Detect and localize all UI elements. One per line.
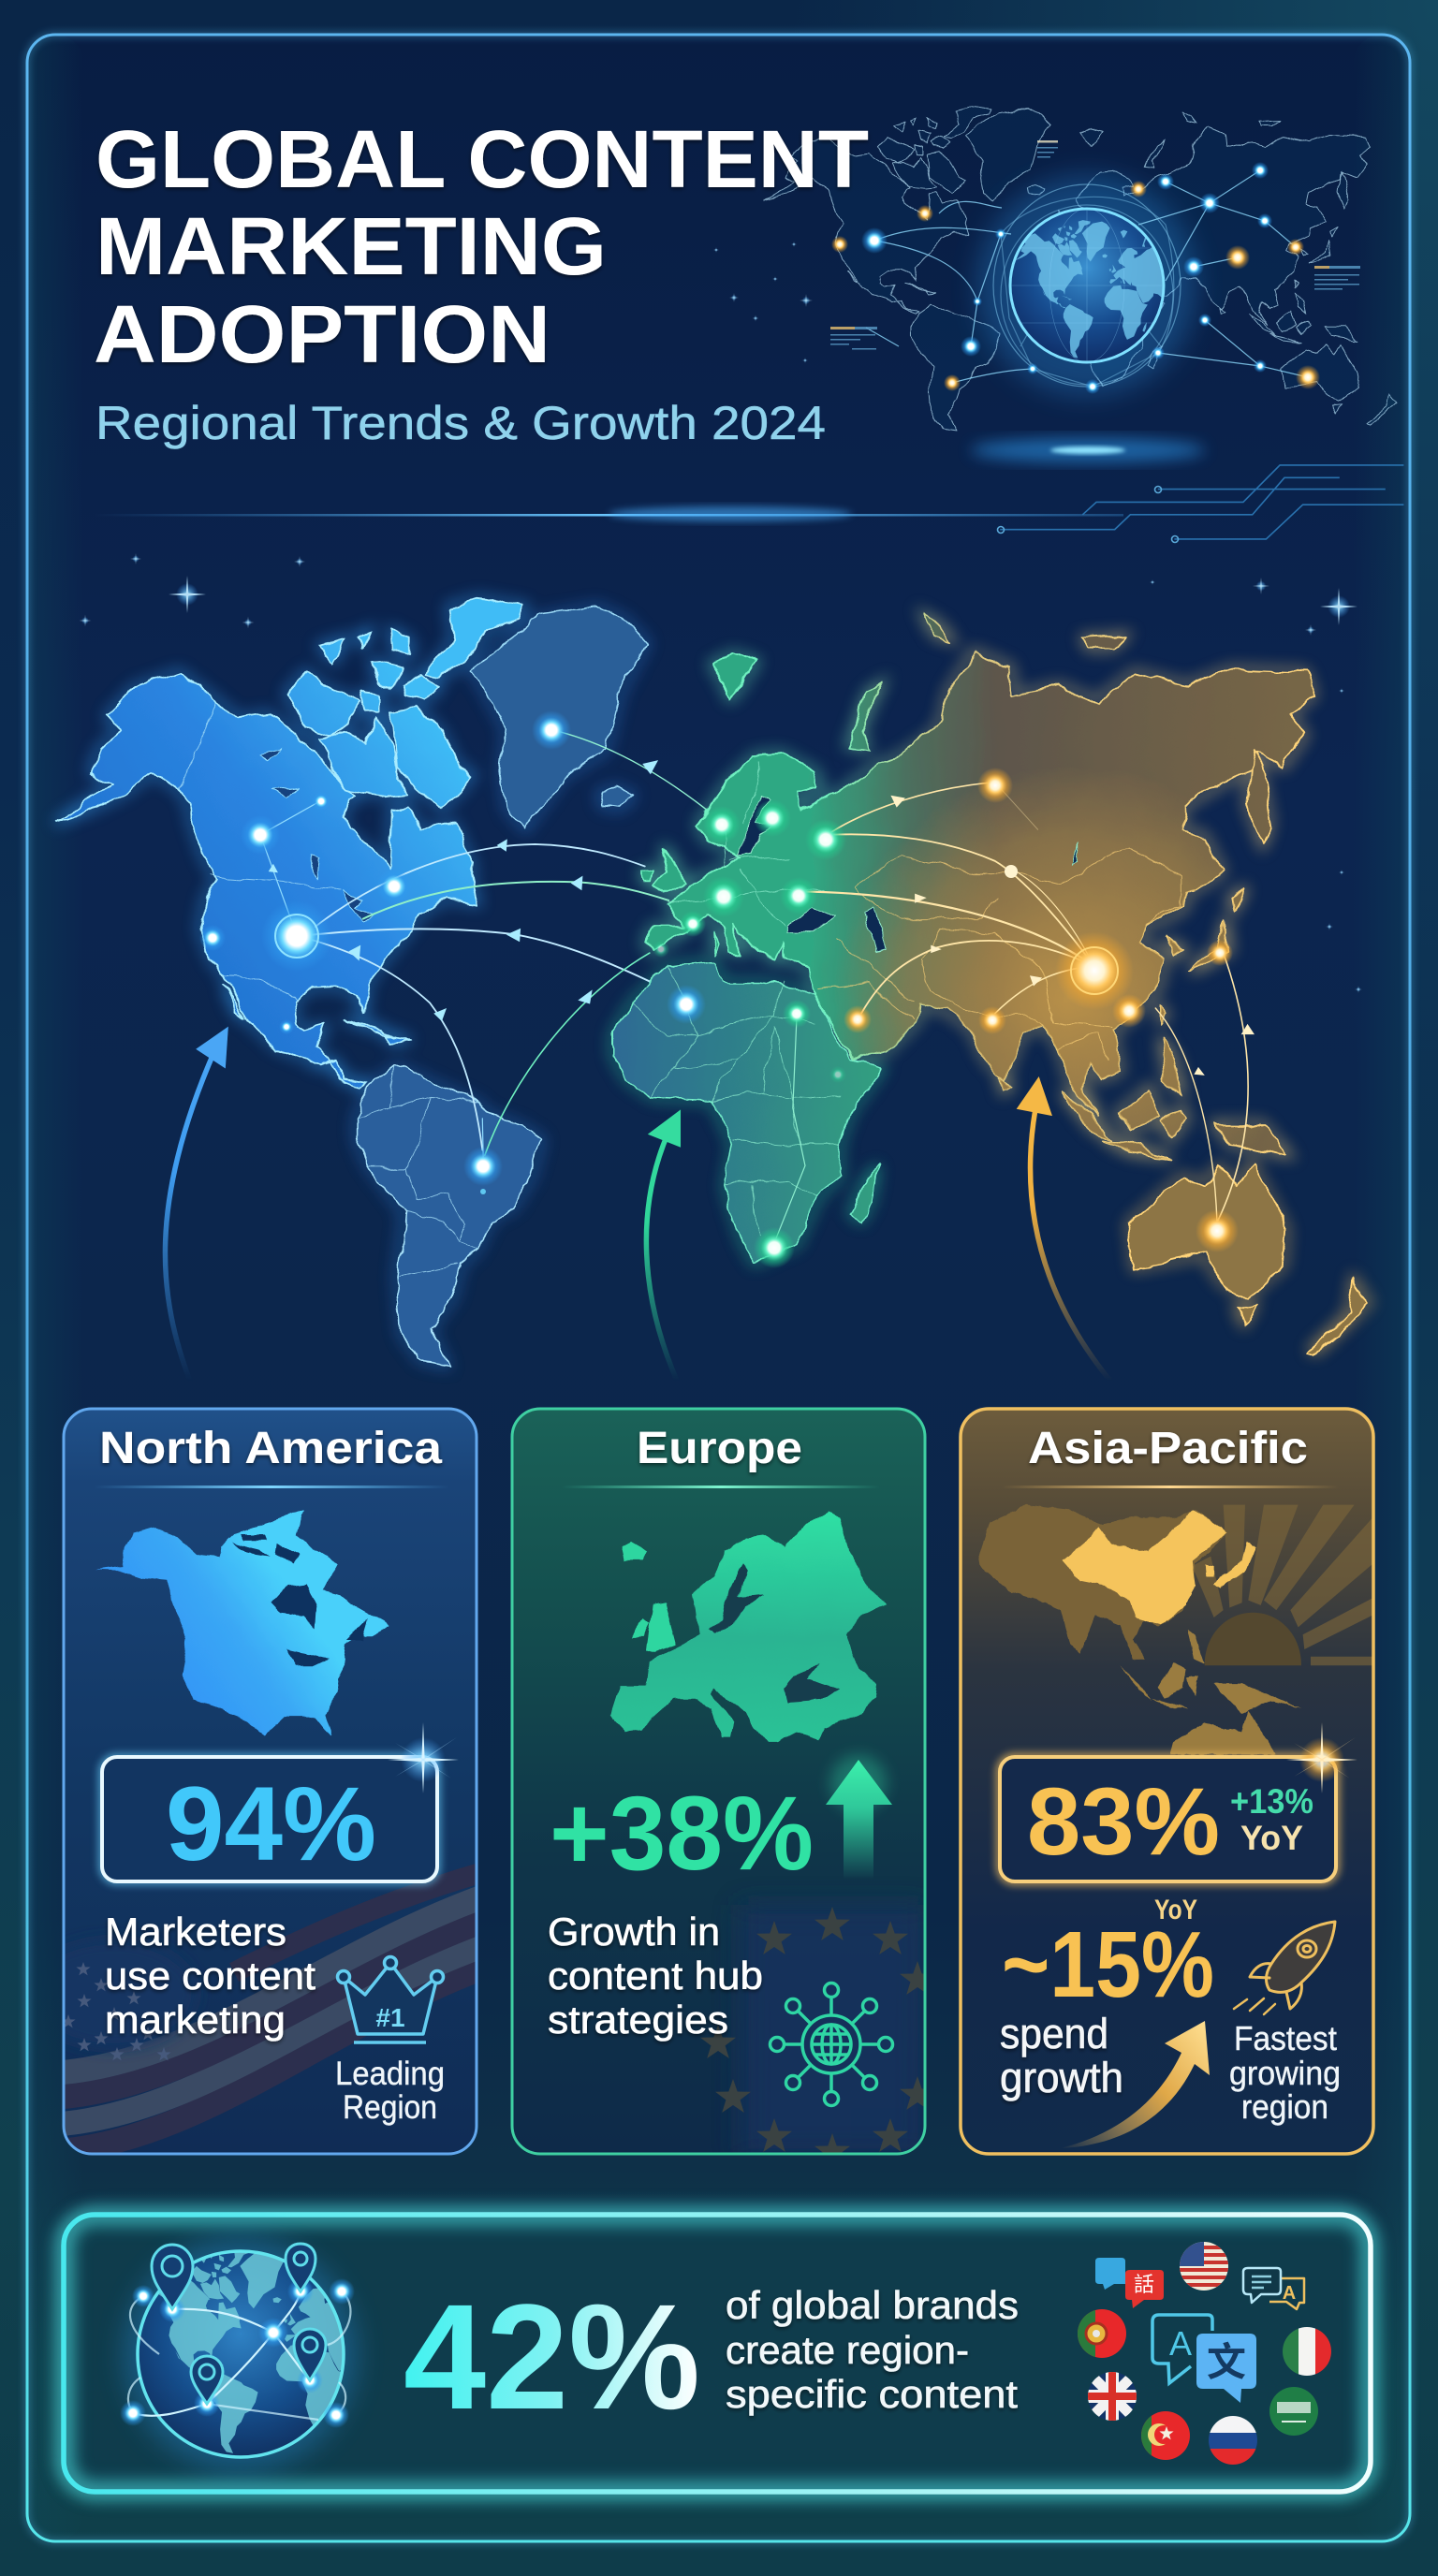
flag: Italy (1283, 2327, 1331, 2376)
panel: global brands callout (64, 2215, 1371, 2492)
header network globe map (766, 105, 1397, 462)
stat box 83% (1000, 1722, 1357, 1881)
stat ~15% YoY: YoY (1154, 1895, 1197, 1925)
eastern connection arcs and arrow (776, 783, 1255, 1383)
description text: marketing (105, 1998, 286, 2042)
title: MARKETING (95, 201, 607, 292)
fastest growing region text (1229, 2019, 1341, 2126)
description text: strategies (548, 1998, 728, 2042)
flag: USA (1180, 2242, 1228, 2291)
icon: rocket (1234, 1922, 1335, 2014)
subtitle: Regional Trends & Growth 2024 (95, 397, 826, 449)
spend growth text: spend (1000, 2010, 1108, 2057)
fastest growing region text: Fastest (1234, 2019, 1337, 2057)
leading region label: Region (343, 2089, 437, 2126)
title: ADOPTION (94, 289, 550, 380)
big green arrow (646, 1109, 681, 1383)
title (94, 114, 869, 380)
mini legends (830, 140, 1360, 350)
chat bubbles: blue and red (1095, 2258, 1164, 2308)
panel: Europe (512, 1409, 935, 2167)
flag: Saudi Arabia (1269, 2387, 1318, 2436)
chat bubbles: text and A (1243, 2268, 1304, 2309)
map: Asia-Pacific with rising sun (978, 1505, 1373, 1754)
US flag backdrop (28, 1872, 484, 2151)
callout text: specific content (726, 2372, 1018, 2416)
title: GLOBAL CONTENT (95, 114, 869, 205)
fastest growing region text: region (1241, 2087, 1328, 2126)
small world outline map (766, 105, 1397, 430)
big blue arrow (165, 1027, 228, 1383)
callout text (726, 2283, 1019, 2416)
icon: crown (337, 1956, 444, 2042)
panel: North America (28, 1409, 484, 2154)
flag: Portugal (1078, 2309, 1126, 2358)
blue map nodes (199, 710, 706, 1194)
network lines (866, 170, 1308, 387)
growth arrow (1061, 2021, 1210, 2148)
description text (105, 1910, 315, 2042)
spend growth text: growth (1000, 2054, 1123, 2101)
gold map nodes (844, 768, 1239, 1252)
flag: UK (1088, 2372, 1137, 2421)
americas and greenland land (55, 598, 647, 1366)
map glow (55, 598, 1370, 1366)
card heading: Europe (637, 1424, 802, 1473)
description text: Growth in (548, 1910, 720, 1954)
flag: Russia (1209, 2416, 1257, 2465)
network nodes (831, 162, 1320, 394)
icon: content hub (770, 1983, 893, 2106)
description text: content hub (548, 1954, 763, 1998)
callout text: of global brands (726, 2283, 1019, 2327)
stat box 83%: YoY (1240, 1819, 1303, 1857)
description text (548, 1910, 763, 2042)
stat +38%: +38% (550, 1775, 814, 1892)
africa europe asia oceania land (612, 614, 1370, 1353)
icon: up arrow (826, 1755, 892, 1880)
stat ~15% YoY: ~15% (1002, 1912, 1214, 2017)
translation bubbles: A (1169, 2324, 1192, 2363)
header divider and circuit lines (94, 465, 1403, 543)
icon: crown: #1 (375, 2003, 405, 2032)
background stars (80, 242, 1362, 993)
flag: Turkey (1141, 2411, 1190, 2460)
icon: language flags and chat bubbles (1078, 2242, 1331, 2465)
callout text: create region- (726, 2328, 969, 2372)
translation bubbles (1152, 2315, 1256, 2403)
stat box 83%: 83% (1027, 1768, 1220, 1875)
green map nodes (653, 799, 846, 1268)
map: Europe (610, 1511, 887, 1742)
leading region label (335, 2056, 445, 2126)
spend growth text (1000, 2010, 1123, 2101)
stat box 94%: 94% (166, 1765, 376, 1882)
americas connection arcs and arrows (165, 730, 712, 1383)
panel: Asia-Pacific (961, 1409, 1373, 2154)
card heading: Asia-Pacific (1028, 1424, 1308, 1473)
EU flag backdrop (700, 1905, 923, 2153)
chat bubbles: text and A: A (1283, 2283, 1296, 2304)
stat box 94% (102, 1722, 459, 1882)
stat 42%: 42% (404, 2273, 700, 2440)
leading region label: Leading (335, 2056, 445, 2092)
card heading: North America (99, 1424, 442, 1473)
fastest growing region text: growing (1229, 2054, 1341, 2092)
big gold arrow (1017, 1076, 1113, 1383)
world map (55, 598, 1370, 1383)
description text: use content (105, 1954, 315, 1998)
chat bubbles: blue and red: 話 (1134, 2273, 1154, 2296)
icon: globe with location pins (112, 2228, 369, 2481)
map: North America (95, 1510, 389, 1734)
stat box 83%: +13% (1230, 1782, 1313, 1821)
small globe (1009, 208, 1165, 363)
translation bubbles: 文 (1207, 2340, 1246, 2384)
description text: Marketers (105, 1910, 286, 1954)
